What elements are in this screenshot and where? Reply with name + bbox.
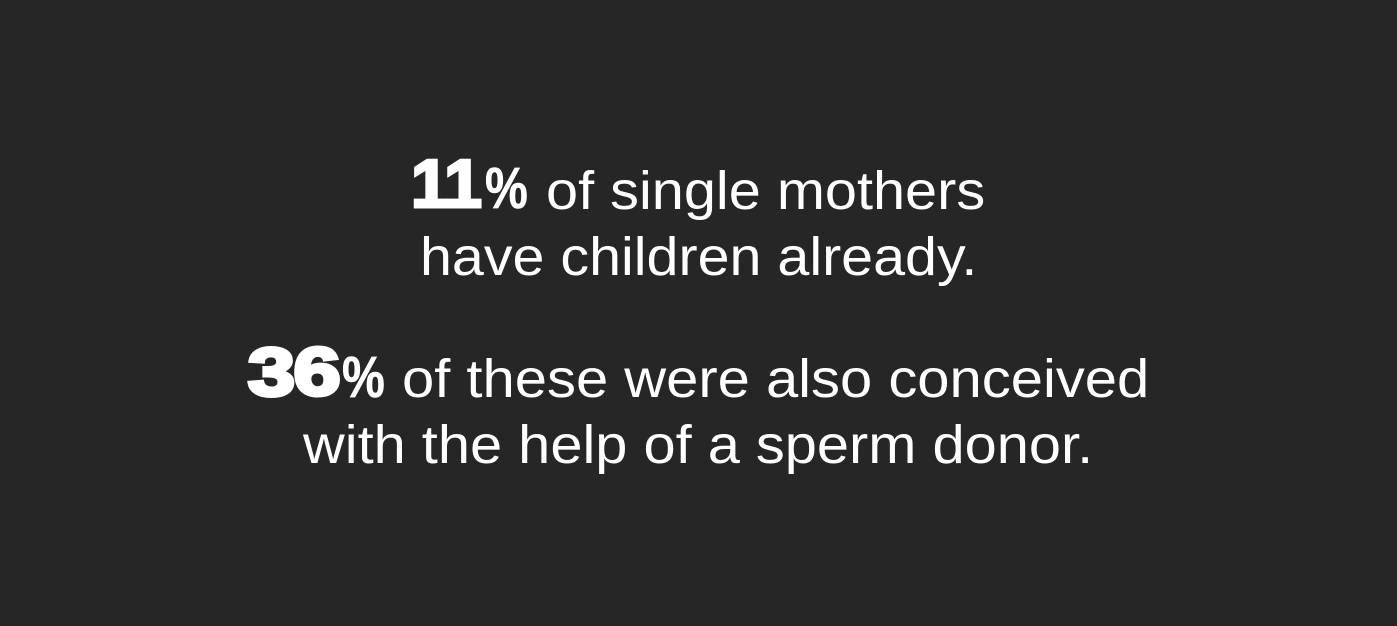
stat percent sign: %	[342, 345, 385, 410]
text: have children already.: have children already.	[420, 227, 977, 287]
statement: 36% conceived with sperm donor	[247, 334, 1149, 475]
stat number: 36: 36	[248, 334, 339, 410]
text: with the help of a sperm donor.: with the help of a sperm donor.	[303, 415, 1093, 475]
statement: 11% of single mothers	[411, 146, 985, 287]
stat percent sign: %	[485, 156, 528, 221]
text: of single mothers: of single mothers	[546, 161, 985, 221]
text: of these were also conceived: of these were also conceived	[402, 349, 1149, 409]
stat number: 11: 11	[411, 146, 481, 222]
